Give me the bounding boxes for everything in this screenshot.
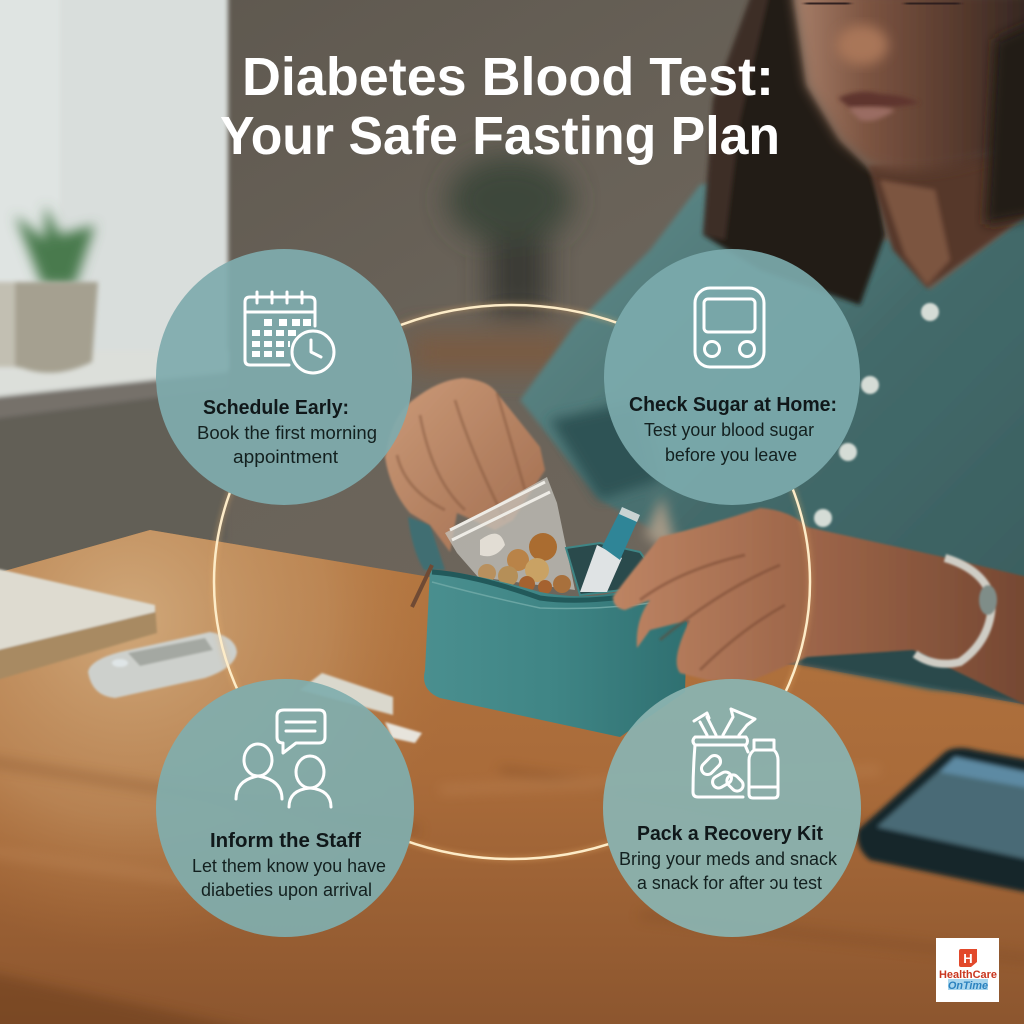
left sleeve behind hand <box>408 517 445 570</box>
logo: HealthCare OnTime: H <box>963 951 973 966</box>
hair on right of face <box>985 20 1024 225</box>
title: Diabetes Blood Test: <box>242 47 774 107</box>
lighter wood at left of table <box>0 530 500 960</box>
panel: pack a recovery kit <box>603 679 861 937</box>
dark pouch interior <box>566 543 664 595</box>
title: Your Safe Fasting Plan <box>220 106 780 166</box>
potted plant <box>15 205 95 285</box>
room wall <box>0 0 1024 620</box>
panel: schedule early <box>156 249 412 505</box>
text: check sugar at home: Test your blood sugar <box>644 420 814 440</box>
icon: two people with speech bubble <box>236 710 331 807</box>
right hand and forearm <box>613 508 1024 712</box>
text: pack a recovery kit: Pack a Recovery Kit <box>637 823 823 845</box>
text: inform the staff: Inform the Staff <box>210 830 361 852</box>
wooden table <box>0 530 1024 1024</box>
smartphone on table <box>858 748 1024 895</box>
icon: glucose meter <box>695 288 764 367</box>
logo: HealthCare OnTime: HealthCare <box>939 969 997 981</box>
bright window panel <box>0 0 228 370</box>
silver bracelet <box>915 558 997 664</box>
face features: eyes, nose and lips <box>805 3 960 121</box>
lancing pen <box>580 507 640 592</box>
glucose meter on table <box>88 632 237 698</box>
panel: inform the staff <box>156 679 414 937</box>
snack bag with nuts <box>445 477 575 594</box>
text: check sugar at home: Check Sugar at Home: <box>629 394 837 416</box>
icon: calendar with clock <box>245 292 334 373</box>
shirt shadow under sleeve and beige gap <box>550 400 680 560</box>
woman's face <box>793 0 1024 171</box>
text: check sugar at home: before you leave <box>665 445 797 465</box>
glowing connecting ring <box>214 305 810 859</box>
notebook on table <box>0 567 157 682</box>
window sill <box>0 350 228 590</box>
text: schedule early: Schedule Early: <box>203 397 349 419</box>
text: pack a recovery kit <box>619 823 838 893</box>
logo: HealthCare OnTime: OnTime <box>948 980 988 992</box>
woman's neck <box>868 150 1024 288</box>
icon: recovery kit bag and bottle <box>693 709 778 798</box>
text: inform the staff <box>192 830 386 900</box>
text: check sugar at home <box>629 394 837 465</box>
text: inform the staff: diabeties upon arrival <box>201 880 372 900</box>
shirt buttons <box>814 303 939 527</box>
text: inform the staff: Let them know you have <box>192 856 386 876</box>
plant pot <box>0 282 98 373</box>
title <box>220 47 780 166</box>
woman's hair <box>703 0 885 305</box>
text: pack a recovery kit: Bring your meds and snack <box>619 849 838 869</box>
test strip box on table <box>300 673 422 743</box>
text: schedule early: appointment <box>233 447 338 467</box>
logo: HealthCare OnTime <box>936 938 999 1002</box>
woman's shirt <box>520 180 1024 706</box>
left hand holding snack bag <box>385 378 545 552</box>
text: schedule early: Book the first morning <box>197 423 377 443</box>
table wood grain and shadow <box>0 760 1024 1024</box>
text: pack a recovery kit: a snack for after ɔu test <box>637 873 822 893</box>
text: schedule early <box>197 397 377 467</box>
blurred background plant and shelf <box>410 156 572 370</box>
panel: check sugar at home <box>604 249 860 505</box>
teal zip pouch <box>412 565 687 737</box>
